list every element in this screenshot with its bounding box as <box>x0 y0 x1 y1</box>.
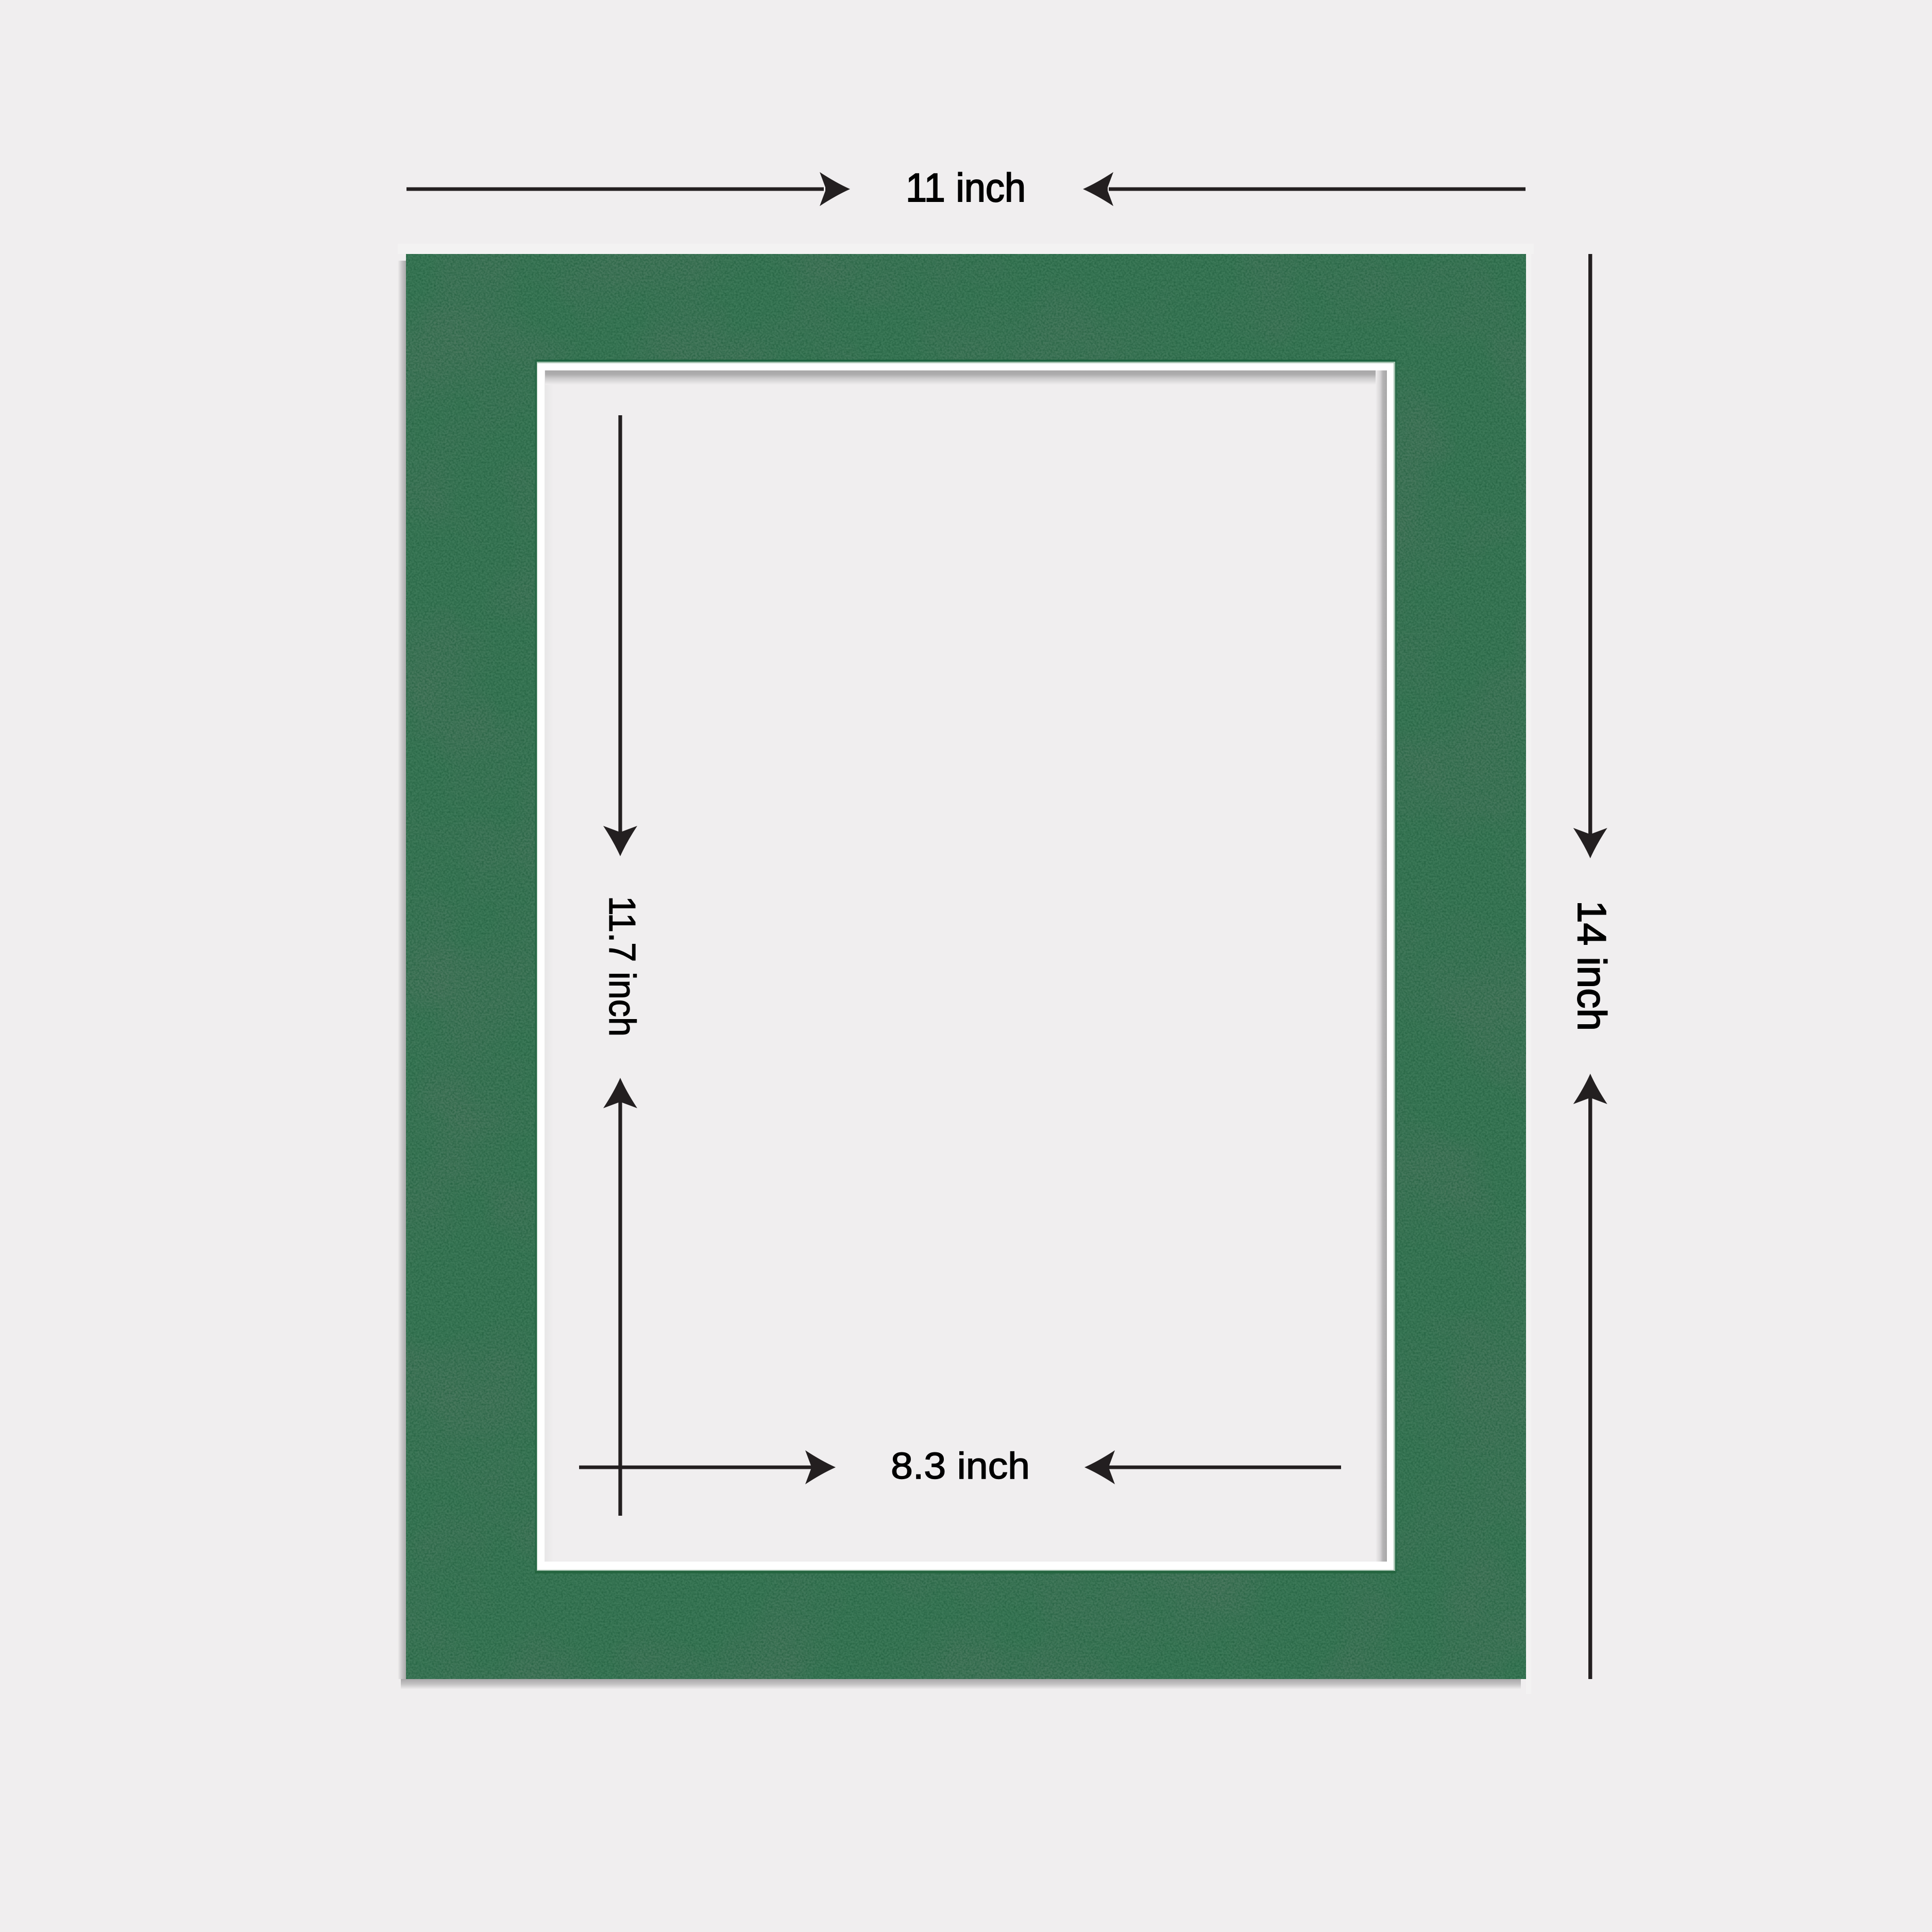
white bevel edge <box>537 363 1394 1570</box>
arrow: right side bottom, height <box>1573 1074 1607 1679</box>
arrow: right side top, height <box>1573 254 1607 858</box>
arrow: inner width, right <box>1084 1450 1341 1484</box>
label: 11.7 inch: 11.7 inch <box>601 896 642 1037</box>
panel: green mat board with window opening <box>398 244 1534 1694</box>
window opening <box>545 370 1387 1562</box>
label: 14 inch: 14 inch <box>1569 901 1615 1031</box>
label: 8.3 inch: 8.3 inch <box>891 1446 1030 1487</box>
arrow: inner height, lower <box>603 1078 637 1516</box>
arrow: top left, width <box>406 172 850 206</box>
label: 11 inch: 11 inch <box>906 165 1026 210</box>
arrow: inner height, upper <box>603 415 637 856</box>
arrow: top right, width <box>1083 172 1526 206</box>
arrow: inner width, left <box>579 1450 836 1484</box>
